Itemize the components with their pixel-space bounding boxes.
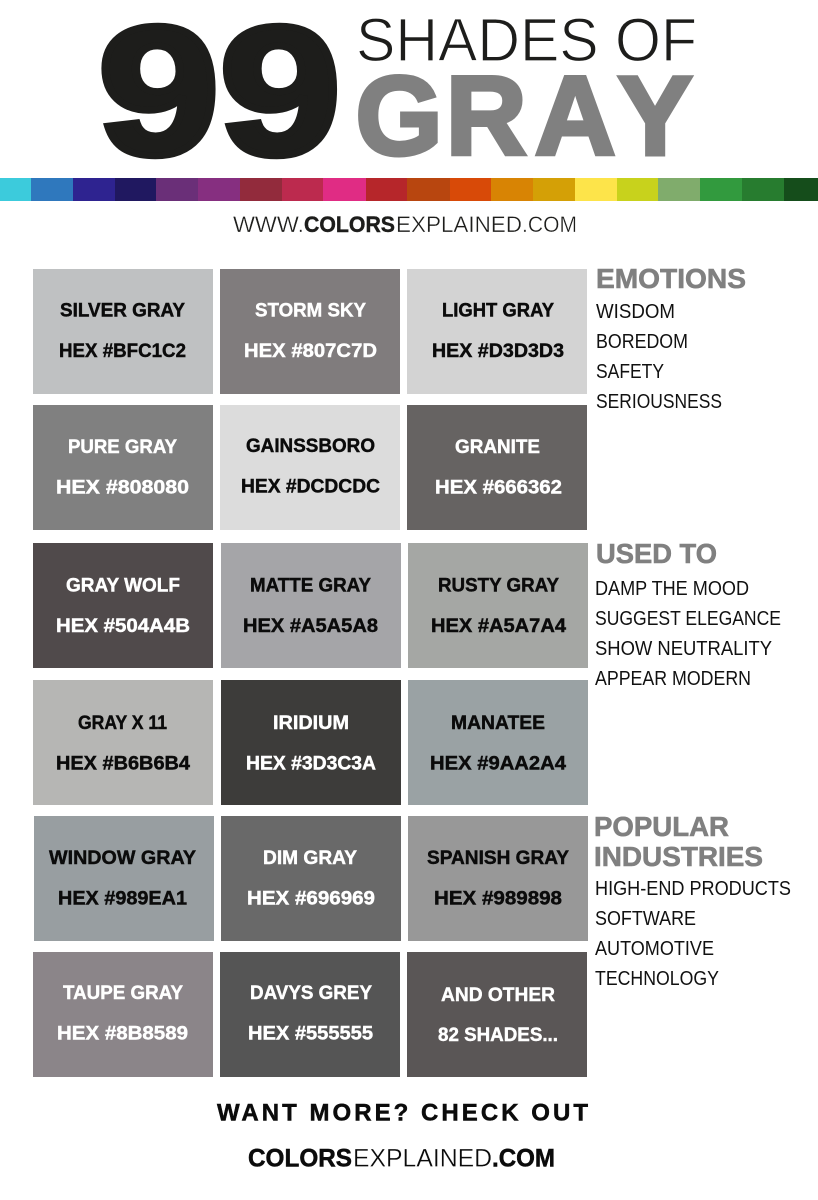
swatch: and other 82 shades [407, 952, 587, 1077]
panel: emotions [596, 263, 746, 413]
swatch: and other 82 shades: AND OTHER [441, 984, 555, 1006]
swatch: storm sky: STORM SKY [255, 300, 366, 322]
panel: popular industries: HIGH-END PRODUCTS [595, 877, 791, 900]
swatch: granite: HEX #666362 [435, 476, 562, 498]
swatch: window gray: WINDOW GRAY [49, 847, 196, 869]
swatch: gray wolf: HEX #504A4B [56, 615, 190, 637]
swatch: light gray: HEX #D3D3D3 [432, 340, 564, 362]
swatch: taupe gray [33, 952, 213, 1077]
footer website: COLORS [248, 1144, 352, 1172]
swatch: gray x 11 [33, 680, 213, 805]
swatch: davys grey: HEX #555555 [248, 1022, 373, 1044]
panel: emotions: WISDOM [596, 300, 675, 323]
panel: emotions: SAFETY [596, 360, 664, 383]
swatch: granite: GRANITE [455, 436, 540, 458]
title word: gray: GRAY [356, 54, 693, 178]
swatch: taupe gray: HEX #8B8589 [57, 1022, 188, 1044]
swatch: manatee [408, 680, 588, 805]
panel: used to: SUGGEST ELEGANCE [595, 607, 781, 630]
panel: popular industries: TECHNOLOGY [595, 967, 719, 990]
panel: used to: SHOW NEUTRALITY [595, 637, 772, 660]
swatch: matte gray: HEX #A5A5A8 [243, 615, 378, 637]
swatch: and other 82 shades: 82 SHADES... [438, 1024, 558, 1046]
footer call to action: WANT MORE? CHECK OUT [217, 1100, 588, 1126]
swatch: gray x 11: GRAY X 11 [78, 712, 167, 734]
swatch: light gray [407, 269, 587, 394]
panel: popular industries: SOFTWARE [595, 907, 696, 930]
swatch: davys grey [220, 952, 400, 1077]
swatch: spanish gray: HEX #989898 [434, 888, 562, 910]
swatch: manatee: MANATEE [451, 712, 545, 734]
swatch: pure gray [33, 405, 213, 530]
swatch: gray wolf: GRAY WOLF [66, 574, 180, 596]
swatch: dim gray [221, 816, 401, 941]
swatch: pure gray: PURE GRAY [68, 436, 177, 458]
heading: emotions: EMOTIONS [596, 263, 746, 294]
swatch: dim gray: HEX #696969 [247, 888, 375, 910]
footer website: EXPLAINED [353, 1144, 492, 1172]
swatch: iridium [221, 680, 401, 805]
swatch: storm sky: HEX #807C7D [244, 340, 377, 362]
swatch: gainssboro: HEX #DCDCDC [241, 476, 380, 498]
swatch: taupe gray: TAUPE GRAY [63, 982, 183, 1004]
heading: popular industries [594, 811, 763, 872]
rainbow color bar [0, 178, 818, 201]
swatch: matte gray [221, 543, 401, 668]
swatch: spanish gray: SPANISH GRAY [427, 847, 569, 869]
website url: WWW. [233, 212, 304, 237]
swatch: window gray [34, 816, 214, 941]
swatch: granite [407, 405, 587, 530]
panel: used to: DAMP THE MOOD [595, 577, 749, 600]
panel: emotions: SERIOUSNESS [596, 390, 722, 413]
website url: COLORS [304, 212, 395, 237]
heading: popular industries: POPULAR [594, 811, 729, 842]
swatch: rusty gray: RUSTY GRAY [438, 574, 559, 596]
website url [233, 212, 577, 237]
website url: EXPLAINED [396, 212, 522, 237]
swatch: davys grey: DAVYS GREY [250, 982, 372, 1004]
panel: popular industries: AUTOMOTIVE [595, 937, 714, 960]
swatch: manatee: HEX #9AA2A4 [430, 752, 566, 774]
heading: popular industries: INDUSTRIES [594, 841, 763, 872]
title line: shades of: SHADES OF [356, 6, 697, 74]
swatch: rusty gray [408, 543, 588, 668]
title [98, 0, 697, 193]
swatch: window gray: HEX #989EA1 [58, 888, 187, 910]
footer website [248, 1144, 555, 1172]
swatch: rusty gray: HEX #A5A7A4 [431, 615, 566, 637]
footer website: .COM [492, 1144, 555, 1172]
swatch: silver gray: SILVER GRAY [60, 300, 185, 322]
panel: used to [595, 538, 781, 690]
swatch: pure gray: HEX #808080 [56, 476, 189, 498]
swatch: silver gray [33, 269, 213, 394]
swatch: gray x 11: HEX #B6B6B4 [56, 752, 190, 774]
swatch: matte gray: MATTE GRAY [250, 574, 371, 596]
panel: emotions: BOREDOM [596, 330, 688, 353]
swatch: gainssboro [220, 405, 400, 530]
swatch: silver gray: HEX #BFC1C2 [59, 340, 186, 362]
panel: used to: APPEAR MODERN [595, 667, 751, 690]
swatch: light gray: LIGHT GRAY [442, 300, 554, 322]
panel: popular industries [594, 811, 791, 990]
website url: .COM [522, 212, 577, 237]
swatch: dim gray: DIM GRAY [263, 847, 357, 869]
swatch: iridium: IRIDIUM [273, 712, 349, 734]
swatch: gainssboro: GAINSSBORO [246, 435, 375, 457]
swatch: gray wolf [33, 543, 213, 668]
heading: used to: USED TO [596, 538, 717, 569]
swatch: iridium: HEX #3D3C3A [246, 752, 376, 774]
swatch: storm sky [220, 269, 400, 394]
swatch: spanish gray [408, 816, 588, 941]
